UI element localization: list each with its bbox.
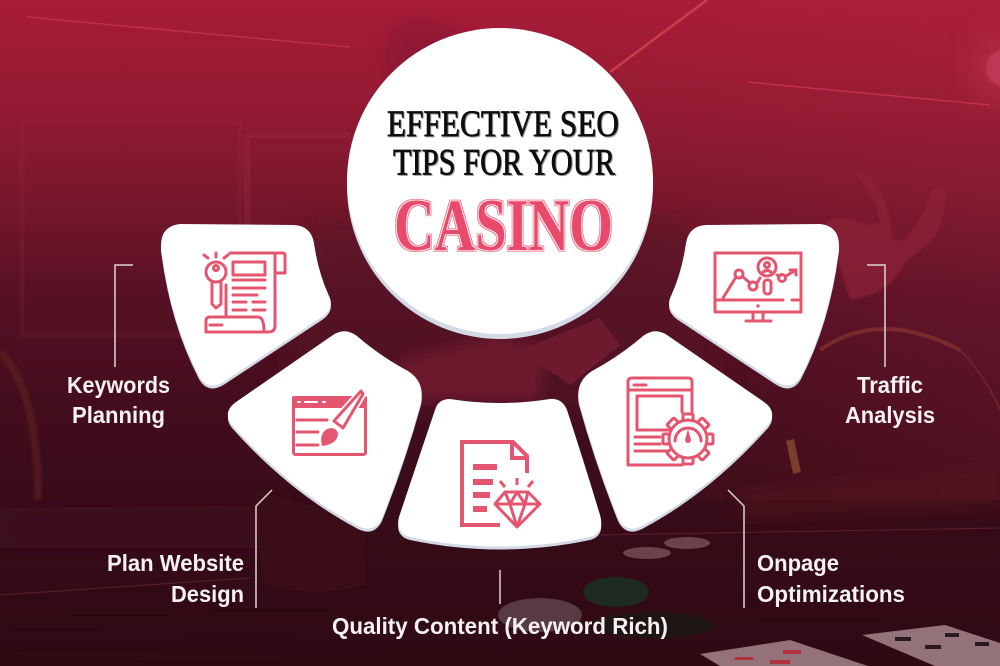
label: keywords planning: Keywords bbox=[67, 372, 170, 398]
icon: key and scroll bbox=[204, 253, 285, 332]
card: onpage optimizations bbox=[578, 331, 772, 532]
heading accent: casino: CASINO bbox=[394, 185, 613, 267]
label: keywords planning bbox=[67, 265, 170, 428]
label: plan website design: Plan Website bbox=[107, 550, 244, 576]
central title circle bbox=[347, 28, 653, 339]
card: traffic analysis bbox=[669, 224, 839, 388]
label: quality content: Quality Content (Keyword Rich) bbox=[332, 613, 668, 639]
icon: document and diamond bbox=[462, 442, 540, 527]
label: traffic analysis: Analysis bbox=[845, 402, 935, 428]
label: plan website design bbox=[107, 490, 272, 608]
label: onpage optimizations: Optimizations bbox=[757, 581, 905, 607]
icon: browser and paintbrush bbox=[292, 390, 367, 454]
label: traffic analysis bbox=[845, 265, 935, 428]
label: onpage optimizations: Onpage bbox=[757, 550, 839, 576]
card: quality content bbox=[398, 399, 601, 550]
heading line 1: EFFECTIVE SEO bbox=[387, 104, 619, 145]
label: traffic analysis: Traffic bbox=[857, 372, 923, 398]
card: keywords planning bbox=[161, 224, 331, 388]
card: plan website design bbox=[228, 331, 422, 532]
heading line 2: TIPS FOR YOUR bbox=[393, 142, 615, 184]
label: keywords planning: Planning bbox=[72, 402, 165, 428]
icon: page and speed gear bbox=[628, 378, 713, 465]
label: onpage optimizations bbox=[728, 490, 905, 608]
icon: monitor with analytics bbox=[715, 253, 801, 321]
label: plan website design: Design bbox=[171, 581, 244, 607]
